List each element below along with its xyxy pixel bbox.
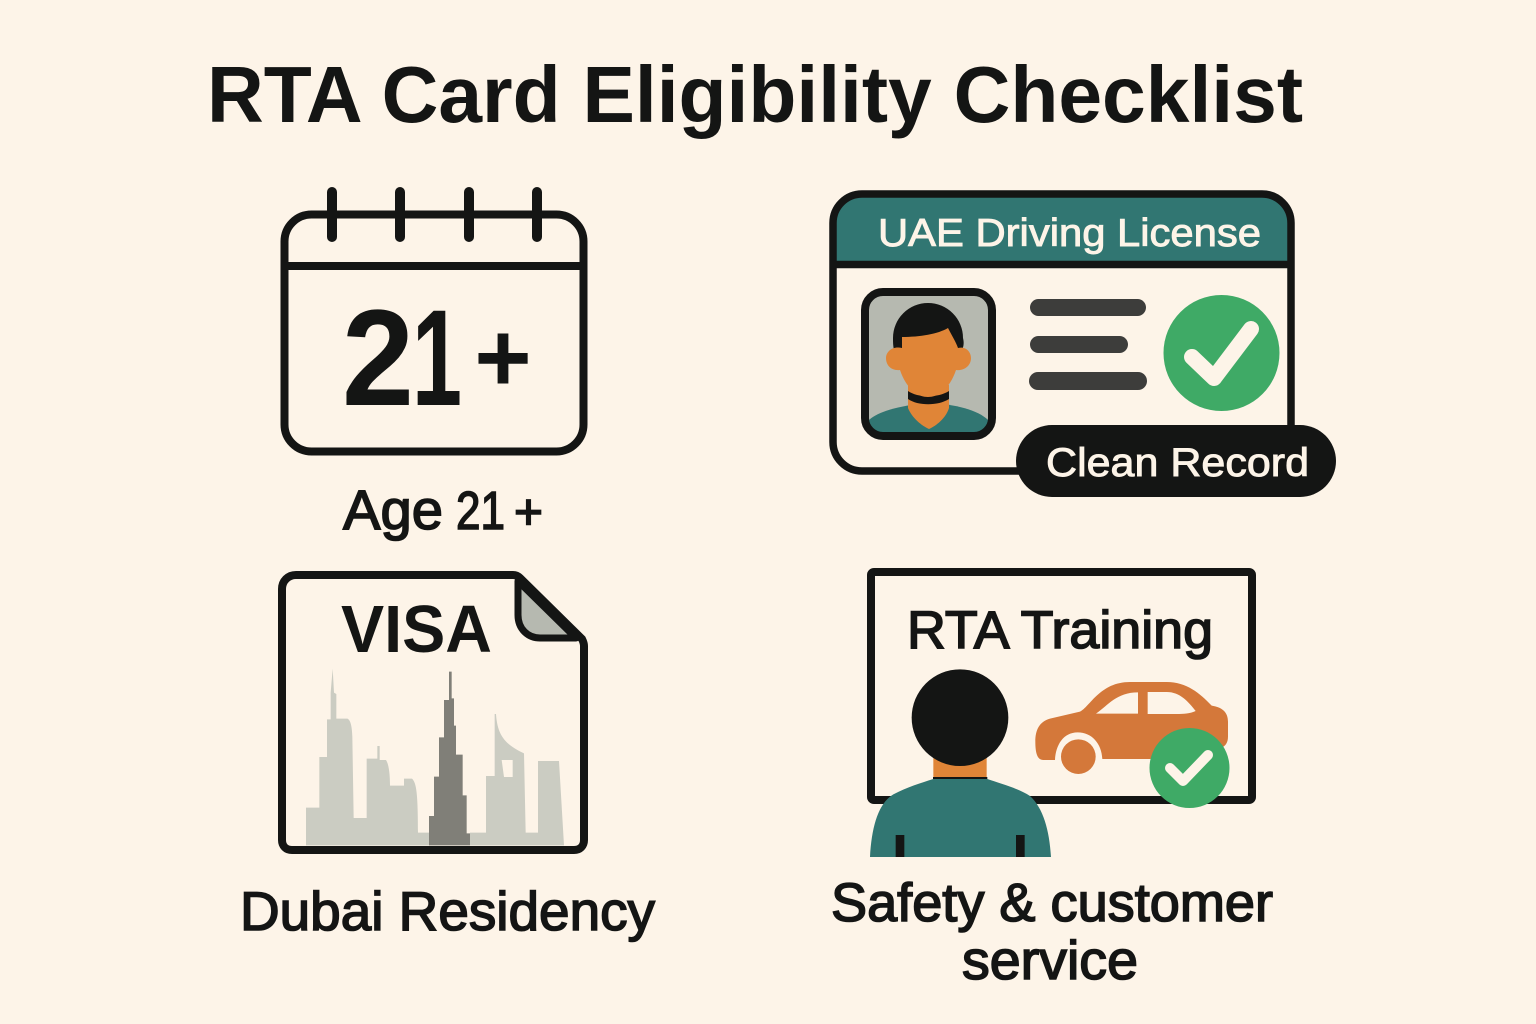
calendar number (342, 282, 462, 435)
skyline (306, 669, 564, 845)
label: age: 21 (456, 481, 505, 541)
panel: rta training (831, 572, 1273, 991)
label: safety and customer service: service (962, 929, 1138, 991)
training board (871, 572, 1252, 800)
panel: driving license (833, 194, 1336, 497)
icon: trainee from behind (870, 669, 1051, 857)
calendar number: 2 (342, 282, 414, 435)
calendar plus sign: + (474, 302, 532, 412)
icon: id photo (865, 292, 992, 436)
icon: visa document (282, 575, 584, 850)
icon: green check (1164, 295, 1280, 411)
board heading: RTA Training (907, 601, 1213, 660)
license card (833, 194, 1291, 471)
label: safety and customer service (831, 873, 1273, 991)
label: age (343, 478, 543, 541)
panel: age requirement (284, 192, 584, 541)
icon: orange car (1035, 682, 1228, 774)
calendar number: 1 (412, 282, 462, 435)
label: age: Age (343, 478, 443, 541)
label: dubai residency: Dubai Residency (240, 880, 655, 942)
license text lines (1029, 299, 1147, 390)
label: age: + (514, 484, 543, 540)
label: safety and customer service: Safety & customer (831, 873, 1273, 933)
panel: dubai residency (240, 575, 655, 942)
icon: calendar (284, 192, 584, 452)
license heading: UAE Driving License (878, 212, 1261, 255)
icon: small green check (1150, 728, 1230, 808)
title: RTA Card Eligibility Checklist (207, 50, 1303, 139)
visa heading: VISA (341, 592, 492, 667)
badge: clean record (1016, 425, 1336, 497)
badge: clean record: Clean Record (1046, 441, 1309, 485)
